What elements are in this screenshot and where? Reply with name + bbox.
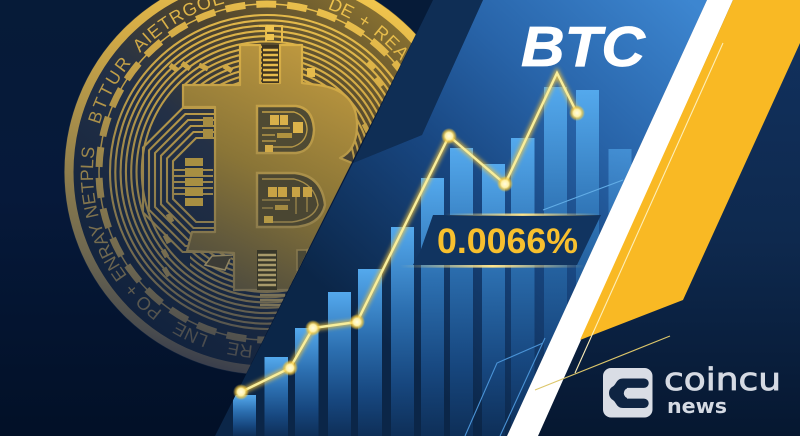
coin ring text xyxy=(80,0,407,358)
icon: coincu mark xyxy=(603,368,652,418)
panel: blue chart background xyxy=(215,0,707,436)
white diagonal stripe xyxy=(507,0,733,436)
left chip stack xyxy=(185,117,213,206)
percentage label xyxy=(400,214,601,268)
coin dashed ring xyxy=(99,4,435,340)
lower bowl cutout xyxy=(257,173,325,227)
coin ring text: NETPLS xyxy=(80,147,98,218)
yellow diagonal panel xyxy=(580,0,800,340)
thin accent lines xyxy=(535,43,723,390)
bitcoin symbol body xyxy=(182,44,358,292)
bitcoin circuit coin xyxy=(64,0,416,374)
coin ring text: PO xyxy=(137,297,162,320)
thin blue accent lines xyxy=(465,180,623,436)
coin ring text: LNE xyxy=(172,322,208,347)
title: BTC: BTC xyxy=(521,15,646,79)
percentage value: 0.0066% xyxy=(437,222,578,261)
coin ring text: ENRAY xyxy=(88,226,126,282)
sub wordmark: news xyxy=(667,394,727,418)
coin ring text: + xyxy=(128,286,136,294)
coin ring text: + xyxy=(360,16,369,25)
panel: dark navy wedge xyxy=(353,0,483,163)
bar chart xyxy=(233,87,632,436)
bottom ladder xyxy=(205,250,307,305)
logo: coincu news xyxy=(603,362,781,418)
top ladder xyxy=(259,25,315,83)
coin rim xyxy=(64,0,416,374)
wordmark: coincu xyxy=(664,362,781,398)
coin circuit rings xyxy=(110,15,424,329)
upper bowl cutout xyxy=(257,106,314,153)
coin ring text: BTTUR xyxy=(88,58,131,124)
coin ring text: RE xyxy=(227,342,252,358)
coin ring text: REAR xyxy=(374,25,407,61)
line chart xyxy=(233,73,585,400)
coin inner dashes xyxy=(163,62,382,276)
